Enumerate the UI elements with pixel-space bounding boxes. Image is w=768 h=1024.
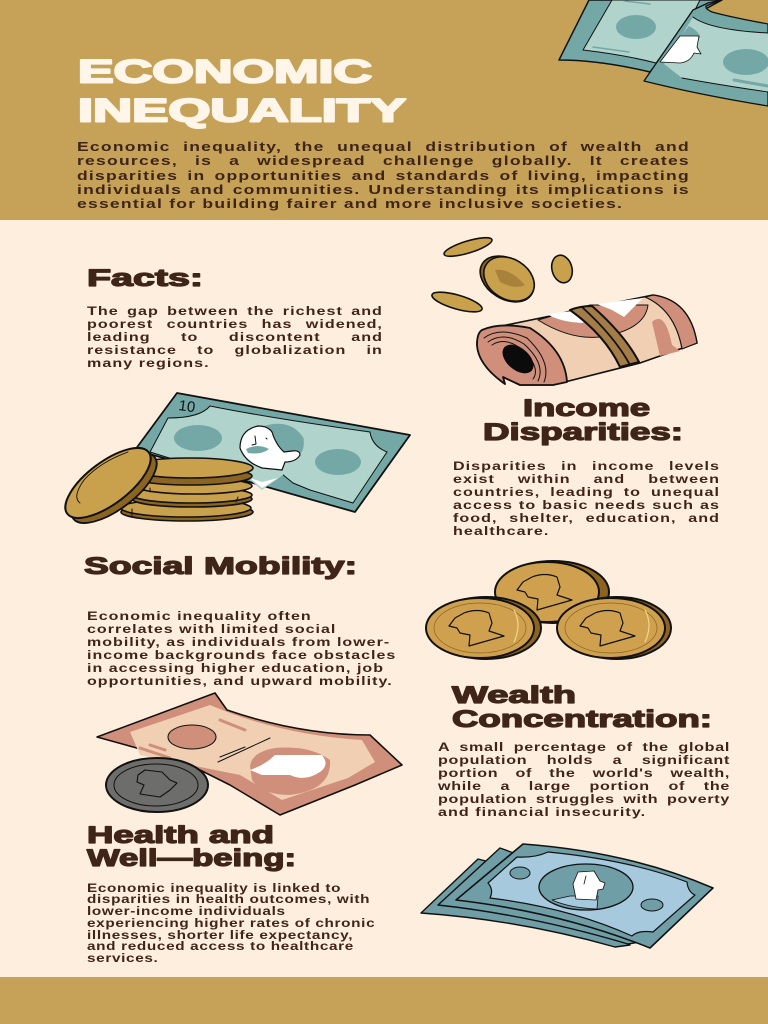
heading: Health and Well-being: Health and xyxy=(87,822,274,849)
text: health and well-being xyxy=(87,882,375,965)
text: social mobility xyxy=(87,611,396,688)
title xyxy=(78,54,406,128)
text: social mobility: Economic inequality often xyxy=(87,611,312,623)
text: health and well-being: lower-income individuals xyxy=(87,906,286,918)
text: income disparities xyxy=(453,461,720,538)
text: social mobility: mobility, as individuals from lower- xyxy=(87,637,390,649)
text: income disparities: countries, leading to unequal xyxy=(453,487,720,499)
text: health and well-being: illnesses, shorter life expectancy, xyxy=(87,930,353,942)
heading: Income Disparities: Disparities: xyxy=(483,419,683,446)
icon: ten banknote and coin stack xyxy=(55,393,410,535)
text: social mobility: in accessing higher education, job xyxy=(87,663,384,675)
text: social mobility: income backgrounds face obstacles xyxy=(87,650,396,662)
text: wealth concentration: population holds a significant xyxy=(438,755,730,767)
icon: stack of blue banknotes xyxy=(421,844,713,948)
heading: Facts: Facts: xyxy=(87,265,203,292)
heading: Health and Well-being xyxy=(87,822,296,872)
heading: Income Disparities xyxy=(483,395,683,446)
icon: falling coins and rolled cash xyxy=(430,234,697,385)
text: facts: The gap between the richest and xyxy=(87,306,383,318)
intro paragraph: individuals and communities. Understanding its implications is xyxy=(77,183,690,197)
intro paragraph: Economic inequality, the unequal distribution of wealth and xyxy=(77,140,690,154)
intro paragraph xyxy=(77,140,690,211)
footer band xyxy=(0,977,768,1024)
text: facts: resistance to globalization in xyxy=(87,345,383,357)
text: facts: poorest countries has widened, xyxy=(87,319,383,331)
text: health and well-being: disparities in health outcomes, with xyxy=(87,894,370,906)
text: wealth concentration: while a large portion of the xyxy=(438,781,730,793)
text: health and well-being: Economic inequality is linked to xyxy=(87,882,341,894)
text: income disparities: food, shelter, education, and xyxy=(453,513,720,525)
icon: folded banknotes top right xyxy=(559,0,768,106)
text: wealth concentration: portion of the world's wealth, xyxy=(438,768,730,780)
heading: Income Disparities: Income xyxy=(523,395,650,422)
icon: three gold coins xyxy=(426,561,671,659)
text: income disparities: exist within and between xyxy=(453,474,720,486)
icon: ten banknote and coin stack: 10 xyxy=(177,397,196,416)
heading: Wealth Concentration: Wealth xyxy=(452,682,576,709)
text: health and well-being: and reduced access to healthcare xyxy=(87,941,354,953)
heading: Wealth Concentration: Concentration: xyxy=(452,706,712,733)
text: facts: many regions. xyxy=(87,358,210,370)
intro paragraph: essential for building fairer and more inclusive societies. xyxy=(77,197,623,211)
text: income disparities: healthcare. xyxy=(453,526,549,538)
intro paragraph: resources, is a widespread challenge globally. It creates xyxy=(77,154,690,168)
text: facts: leading to discontent and xyxy=(87,332,383,344)
heading: Wealth Concentration xyxy=(452,682,712,733)
text: health and well-being: services. xyxy=(87,953,158,965)
text: social mobility: correlates with limited social xyxy=(87,624,336,636)
icon: pink banknote and grey coin xyxy=(97,693,402,815)
text: health and well-being: experiencing higher rates of chronic xyxy=(87,918,375,930)
heading: Social Mobility: Social Mobility: xyxy=(84,553,357,580)
text: wealth concentration: A small percentage of the global xyxy=(438,742,730,754)
header band xyxy=(0,0,768,220)
text: income disparities: Disparities in income levels xyxy=(453,461,720,473)
text: income disparities: access to basic needs such as xyxy=(453,500,720,512)
title: ECONOMIC xyxy=(78,54,372,90)
text: wealth concentration: population struggles with poverty xyxy=(438,794,730,806)
title: INEQUALITY xyxy=(78,92,406,128)
text: wealth concentration xyxy=(438,742,730,819)
intro paragraph: disparities in opportunities and standards of living, impacting xyxy=(77,169,690,183)
heading: Health and Well-being: Well—being: xyxy=(87,845,296,872)
text: social mobility: opportunities, and upward mobility. xyxy=(87,676,393,688)
text: wealth concentration: and financial insecurity. xyxy=(438,807,646,819)
text: facts xyxy=(87,306,383,370)
